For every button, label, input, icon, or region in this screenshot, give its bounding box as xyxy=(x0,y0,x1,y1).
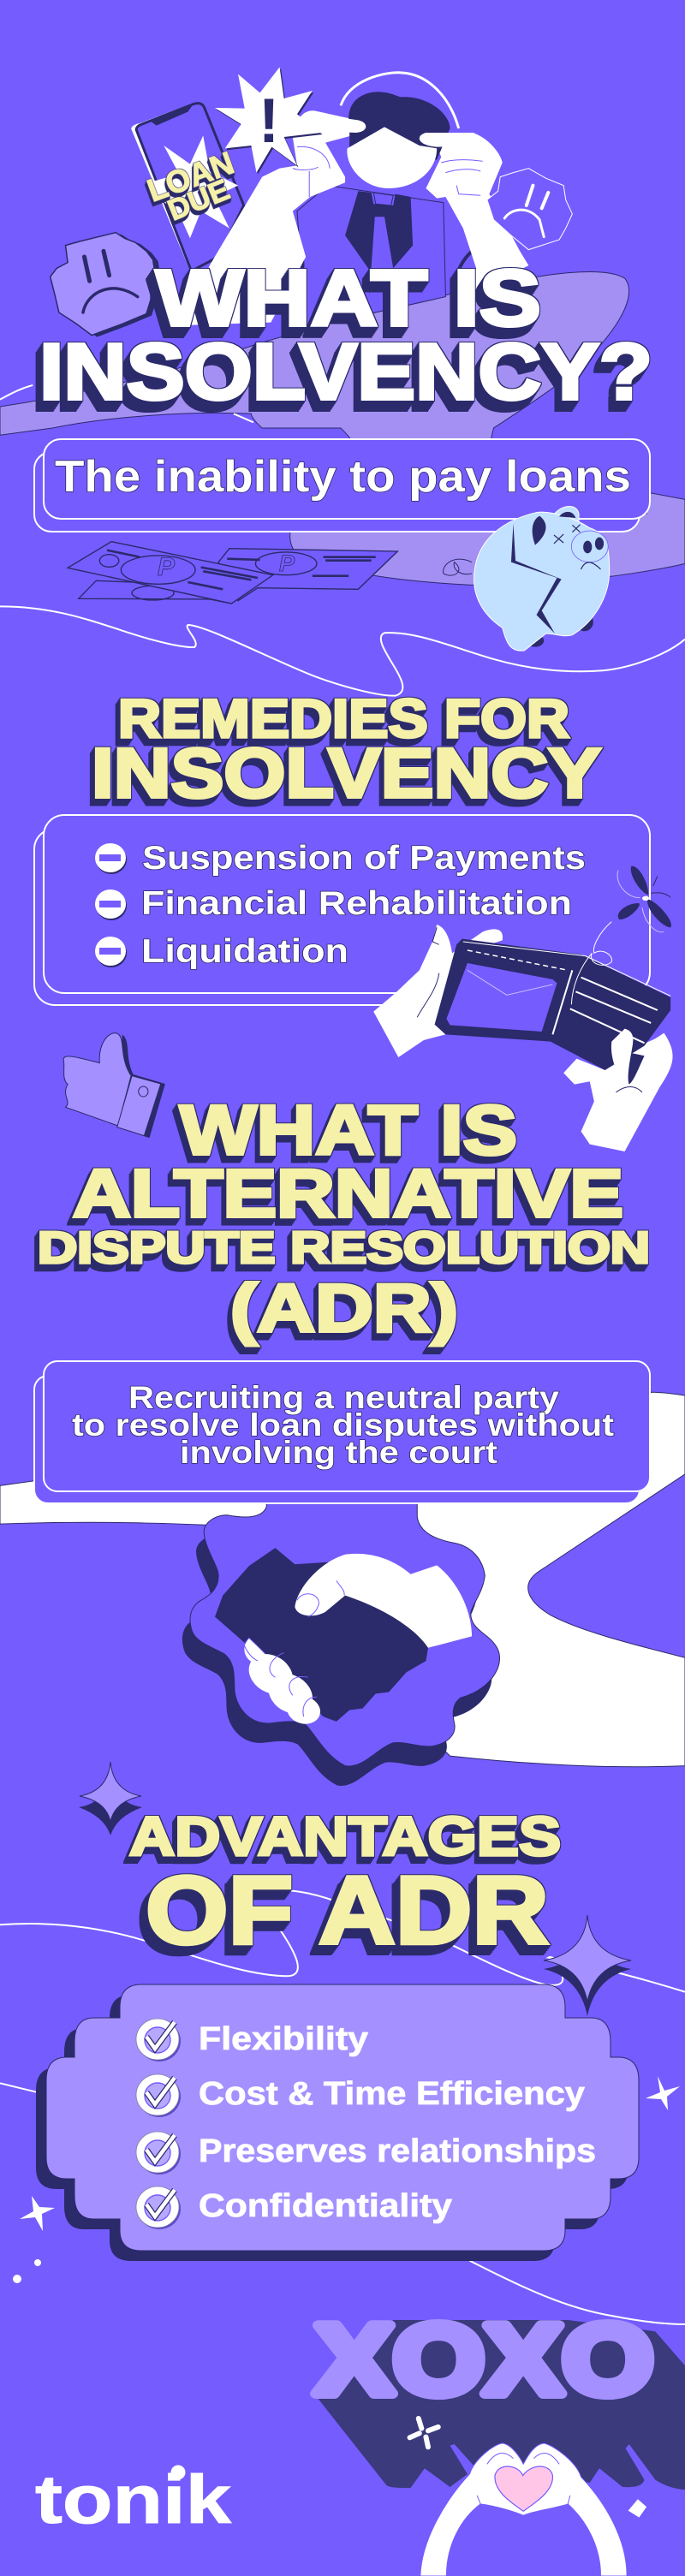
heading: what is alternative dispute resolution: (ADR) xyxy=(230,1270,458,1346)
icon: exclamation burst xyxy=(215,67,323,175)
illustration: broken piggy bank xyxy=(444,507,610,651)
squiggle line below subtitle xyxy=(0,606,685,696)
heading: what is alternative dispute resolution xyxy=(38,1092,650,1346)
xoxo long shadow xyxy=(314,2320,685,2490)
illustration: peso bills xyxy=(68,542,397,604)
icon: sparkle star right xyxy=(544,1915,631,2016)
item: confidentiality xyxy=(136,2186,452,2229)
panel: definition of ADR xyxy=(34,1361,650,1503)
heading: remedies for insolvency xyxy=(92,689,601,812)
item: cost and time efficiency: Cost & Time Efficiency xyxy=(199,2076,585,2112)
icon: sad face badge, left xyxy=(51,233,160,337)
light purple blob under subtitle xyxy=(290,492,685,585)
illustration: person looking down with phone xyxy=(131,73,528,328)
white wave behind ADR handshake xyxy=(0,1392,685,1767)
panel: definition of ADR: involving the court xyxy=(180,1435,497,1470)
panel: definition of insolvency: The inability to pay loans xyxy=(55,452,631,502)
illustration: peso bills: P xyxy=(158,553,176,581)
panel: definition of ADR: Recruiting a neutral party xyxy=(128,1380,559,1415)
illustration: hands holding wallet xyxy=(373,866,673,1151)
arms and hands xyxy=(183,110,528,325)
heading: remedies for insolvency: REMEDIES FOR xyxy=(118,689,569,749)
head xyxy=(306,92,474,188)
decorative dots xyxy=(13,2259,41,2283)
item: cost and time efficiency xyxy=(136,2074,585,2117)
title: what is insolvency xyxy=(39,253,652,416)
icon: sparkle star left xyxy=(79,1762,142,1835)
item: flexibility: Flexibility xyxy=(199,2021,368,2057)
remedy: suspension of payments: Suspension of Payments xyxy=(142,840,586,877)
halo arc xyxy=(341,73,459,128)
panel: definition of ADR: to resolve loan disputes without xyxy=(72,1407,614,1443)
remedy: liquidation: Liquidation xyxy=(141,933,348,970)
heading: advantages of ADR xyxy=(129,1806,561,1964)
heading: what is alternative dispute resolution: WHAT IS xyxy=(180,1092,517,1169)
panel face xyxy=(46,1984,639,2251)
squiggle line to XOXO xyxy=(469,2261,685,2324)
item: flexibility xyxy=(136,2019,368,2061)
remedy: financial rehabilitation: Financial Rehabilitation xyxy=(141,885,572,922)
icon: small white star left xyxy=(20,2196,55,2231)
logo: tonik: tonik xyxy=(35,2461,232,2537)
illustration: handshake badge xyxy=(182,1501,500,1786)
squiggle lines near advantages xyxy=(0,1890,685,2092)
icon: sad face badge, right xyxy=(487,169,572,250)
item: preserves relationships xyxy=(136,2132,596,2174)
heading: advantages of ADR: OF ADR xyxy=(146,1857,549,1964)
panel shadow xyxy=(36,1995,628,2261)
illustration: peso bills: P xyxy=(279,550,295,576)
icon: thumbs up xyxy=(63,1033,165,1138)
panel: advantages list xyxy=(36,1984,639,2261)
sparkle marks xyxy=(410,2418,438,2447)
icon: exclamation burst: ! xyxy=(259,86,279,156)
heading: remedies for insolvency: INSOLVENCY xyxy=(92,735,601,812)
heading: what is alternative dispute resolution: DISPUTE RESOLUTION xyxy=(38,1223,650,1273)
xoxo lettering: XOXO xyxy=(315,2304,653,2415)
icon: small white star right xyxy=(646,2076,680,2110)
light purple hill behind title xyxy=(0,271,629,454)
phone label: loan due: LOAN xyxy=(143,145,238,209)
item: confidentiality: Confidentiality xyxy=(199,2188,452,2224)
panel: list of remedies xyxy=(34,815,650,1005)
panel: definition of insolvency xyxy=(34,439,650,532)
illustration: hands forming a heart xyxy=(420,2443,627,2576)
title: what is insolvency: INSOLVENCY? xyxy=(39,327,652,416)
icon: small diamond star xyxy=(628,2499,646,2518)
title: what is insolvency: WHAT IS xyxy=(156,253,541,342)
item: preserves relationships: Preserves relationships xyxy=(199,2133,596,2169)
heading: what is alternative dispute resolution: ALTERNATIVE xyxy=(73,1155,623,1231)
moth with dashed trail xyxy=(571,922,612,1004)
heading: advantages of ADR: ADVANTAGES xyxy=(129,1806,561,1867)
phone label: loan due: DUE xyxy=(164,173,235,227)
phone xyxy=(131,103,245,271)
suit xyxy=(284,186,476,328)
